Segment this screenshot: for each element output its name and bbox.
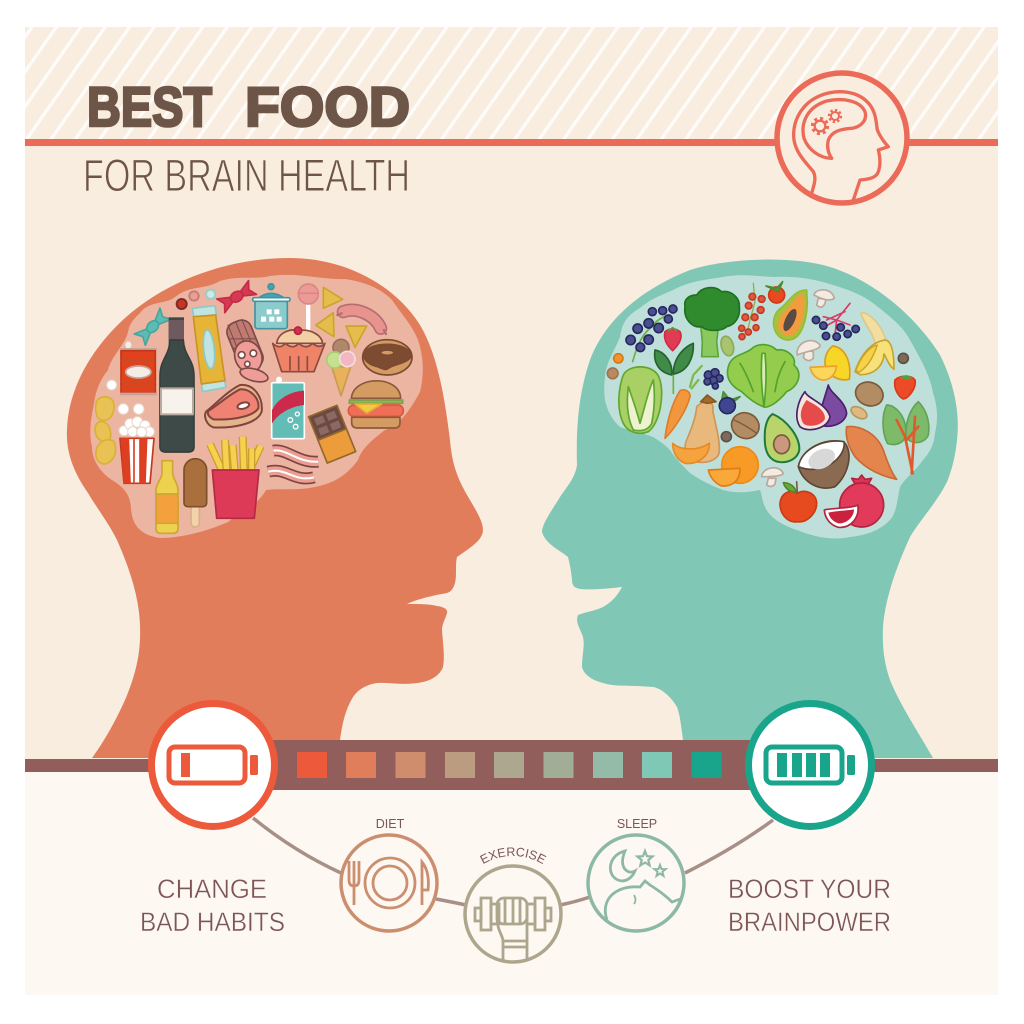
icon: snack bar [192, 306, 226, 392]
icon: burger [348, 381, 403, 428]
icon: avocado [765, 414, 799, 462]
icon: french fries [210, 437, 261, 518]
icon: mushroom top [814, 290, 834, 307]
icon: apple [780, 482, 817, 522]
icon: ice cream cone [327, 339, 355, 396]
icon: red candy [217, 281, 257, 313]
icon: small candies [177, 290, 215, 309]
icon: chips [95, 397, 116, 464]
right caption: BOOST YOUR [728, 874, 891, 904]
icon: butternut squash [673, 395, 719, 464]
icon: orange [708, 447, 758, 486]
band left [25, 759, 155, 772]
icon: nachos [316, 287, 367, 347]
icon: elderberries [812, 303, 859, 340]
left head silhouette [67, 258, 483, 758]
icon: bacon [268, 450, 318, 478]
icon: beer bottle [156, 461, 178, 533]
subtitle: FOR BRAIN HEALTH [83, 150, 410, 201]
right caption: BRAINPOWER [728, 907, 891, 937]
icon: cupcake [273, 327, 325, 372]
icon: pecan nut [849, 378, 886, 421]
icon: small nut and seeds [607, 335, 908, 379]
icon: raspberry [665, 328, 681, 351]
icon: figs [797, 385, 847, 430]
icon: chocolate bar [309, 405, 356, 463]
connector curve [253, 818, 773, 905]
icon: popcorn box [107, 380, 154, 483]
full battery badge [748, 704, 872, 826]
header rule [25, 139, 998, 146]
label: exercise: EXERCISE [480, 848, 546, 864]
icon: blueberries on branch [626, 305, 677, 362]
icon: mushroom bottom [762, 468, 783, 486]
left brain with junk food [90, 275, 423, 538]
label: sleep: SLEEP [617, 817, 657, 831]
icon: small seed [721, 432, 731, 442]
icon: papaya [774, 290, 807, 340]
left caption: CHANGE [157, 874, 267, 904]
left caption [140, 874, 285, 937]
icon: soda can [272, 377, 304, 439]
icon: ice pop [184, 459, 207, 527]
icon: carrot [665, 366, 702, 438]
title [87, 75, 410, 138]
left caption: BAD HABITS [140, 907, 285, 937]
icon: lemon [810, 346, 850, 380]
progress squares [297, 752, 722, 778]
right caption [728, 874, 891, 937]
icon: banana [855, 313, 894, 375]
icon: head with gears [777, 73, 907, 203]
icon: strawberry [895, 375, 915, 399]
icon: sugar jar [253, 284, 290, 329]
exercise icon [465, 866, 561, 962]
icon: lettuce [727, 345, 799, 407]
icon: sweet potato [846, 426, 897, 479]
icon: mushroom middle [797, 341, 820, 361]
icon: swiss chard [883, 402, 929, 473]
icon: wine bottle [160, 317, 194, 452]
title: BEST [87, 75, 212, 138]
icon: teal candy [134, 308, 171, 345]
icon: blueberry [719, 392, 740, 414]
icon: broccoli [685, 288, 740, 357]
icon: chinese cabbage [619, 367, 662, 433]
icon: spinach [655, 343, 693, 393]
film strip bar [270, 740, 755, 790]
sleep icon [588, 835, 684, 931]
title: FOOD [245, 75, 410, 138]
icon: coconut [798, 441, 849, 488]
band right [870, 759, 998, 772]
right brain with healthy food [604, 275, 937, 538]
icon: pomegranate [824, 475, 884, 527]
diet icon [341, 835, 437, 931]
icon: donut [363, 340, 412, 375]
icon: steak [205, 385, 262, 427]
icon: red currants [739, 283, 765, 340]
icon: small tomato [766, 282, 785, 303]
icon: lollipop [298, 284, 318, 332]
icon: sausage [337, 310, 386, 334]
icon: salami [224, 317, 269, 385]
icon: tin can [120, 341, 157, 395]
right head silhouette [542, 260, 958, 758]
low battery badge [152, 704, 274, 826]
icon: walnut [727, 408, 763, 443]
label: diet: DIET [376, 817, 405, 831]
icon: blackberry [704, 369, 723, 389]
